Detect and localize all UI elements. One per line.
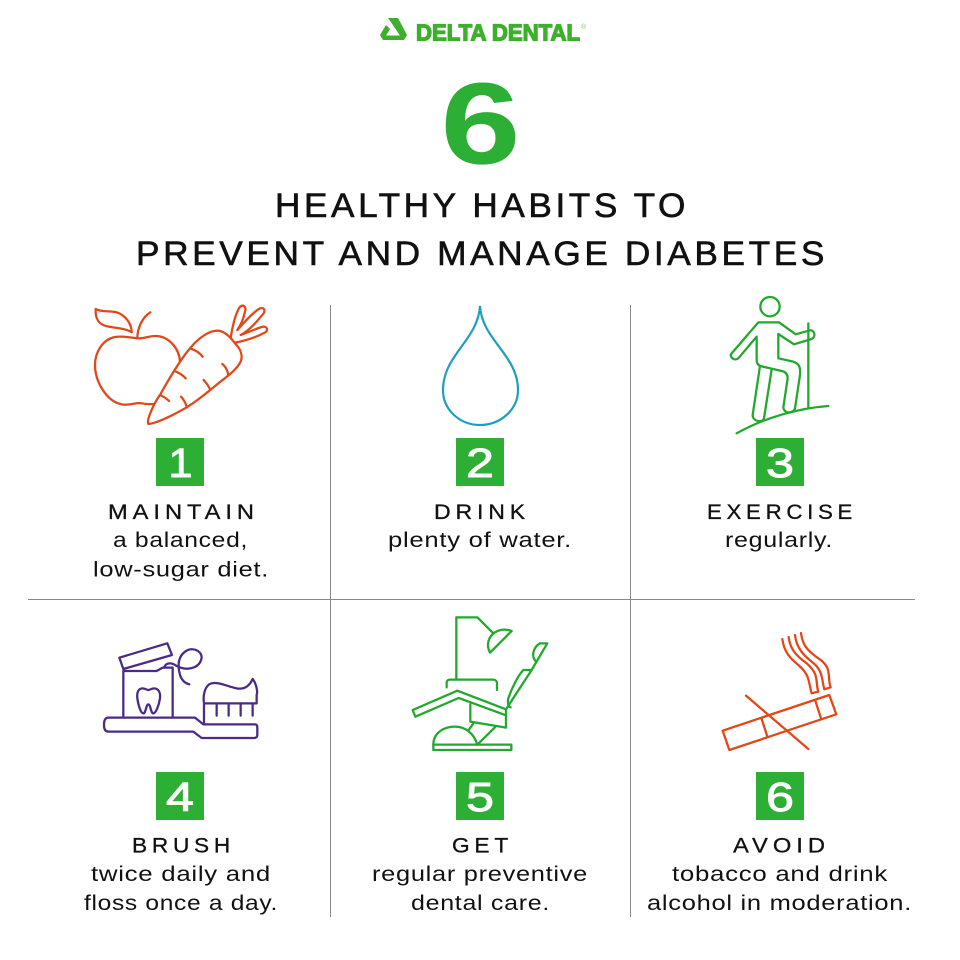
title numeral 6: 6: [440, 58, 520, 188]
icon: water drop: [443, 306, 518, 425]
icon: crossed-out cigarette: [723, 633, 836, 750]
number badge 6: [756, 772, 804, 820]
panel: habit 4 brush: [84, 643, 278, 915]
logo: Delta Dental: DELTA DENTAL: [416, 20, 580, 46]
icon: hiker: [731, 297, 828, 433]
number badge 2: 2: [466, 440, 494, 486]
text: habit 1: low-sugar diet.: [93, 558, 269, 582]
text: habit 2: [388, 500, 572, 552]
text: habit 5: [372, 834, 588, 915]
number badge 4: 4: [166, 774, 194, 820]
logo: Delta Dental: ®: [581, 23, 587, 31]
text: habit 4: [84, 834, 278, 915]
panel: habit 2 water: [388, 306, 572, 552]
panel: habit 3 exercise: [707, 297, 857, 552]
icon: apple and carrot: [95, 306, 267, 424]
panel: habit 5 dental care: [372, 617, 588, 915]
text: habit 1: [93, 500, 269, 582]
text: habit 6: AVOID: [733, 834, 830, 858]
text: habit 2: plenty of water.: [388, 528, 572, 552]
panel: habit 6 avoid: [647, 633, 912, 915]
text: habit 3: [707, 500, 857, 552]
icon: floss and toothbrush: [104, 643, 257, 738]
text: habit 5: GET: [452, 834, 513, 858]
panel: habit 1 diet: [93, 306, 269, 582]
text: habit 6: alcohol in moderation.: [647, 891, 912, 915]
number badge 4: [156, 772, 204, 820]
number badge 5: [456, 772, 504, 820]
number badge 5: 5: [466, 774, 494, 820]
heading: PREVENT AND MANAGE DIABETES: [136, 235, 828, 273]
number badge 3: [756, 438, 804, 486]
text: habit 2: DRINK: [434, 500, 530, 524]
number badge 6: 6: [766, 774, 794, 820]
text: habit 4: BRUSH: [132, 834, 235, 858]
text: habit 5: regular preventive: [372, 862, 588, 886]
text: habit 5: dental care.: [411, 891, 550, 915]
text: habit 1: a balanced,: [113, 528, 248, 552]
heading: HEALTHY HABITS TO: [275, 187, 689, 225]
number badge 1: 1: [168, 440, 192, 486]
icon: dental chair: [413, 617, 547, 750]
text: habit 4: floss once a day.: [84, 891, 278, 915]
number badge 3: 3: [766, 440, 794, 486]
heading: [136, 187, 828, 273]
text: habit 4: twice daily and: [91, 862, 271, 886]
text: habit 6: [647, 834, 912, 915]
text: habit 3: EXERCISE: [707, 500, 857, 524]
number badge 2: [456, 438, 504, 486]
text: habit 3: regularly.: [725, 528, 833, 552]
number badge 1: [156, 438, 204, 486]
text: habit 1: MAINTAIN: [108, 500, 259, 524]
text: habit 6: tobacco and drink: [672, 862, 888, 886]
